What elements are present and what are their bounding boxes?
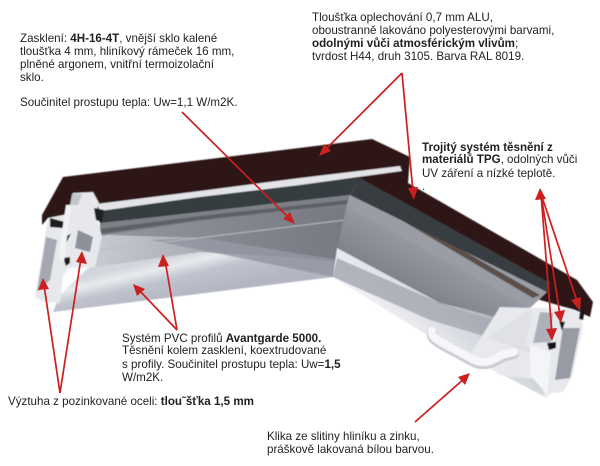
- translucent band right: [333, 258, 500, 337]
- text: triple seal: UV záření a nízké teplotě.: [422, 167, 555, 180]
- dark bead line left: [100, 200, 348, 234]
- arrows: flashing: [319, 73, 418, 200]
- text: triple seal: materiálů TPG: [422, 153, 501, 166]
- text: flashing: odolnými vůči atmosférickým vlivům: [312, 37, 515, 50]
- grey bead right: [347, 192, 547, 308]
- text: PVC profile: W/m2K.: [122, 371, 163, 384]
- text: glazing: Zasklení: 4H-16-4T, vnější sklo kalené: [20, 32, 217, 45]
- text: glazing: plněné argonem, vnitřní termoizolační: [20, 58, 215, 71]
- right cross-section profile: [470, 307, 585, 398]
- text: flashing: oboustranně lakováno polyesterovými barvami,: [312, 24, 554, 37]
- text: glazing: sklo.: [20, 71, 44, 84]
- text: PVC profile: Těsnění kolem zasklení, koextrudované: [122, 344, 326, 357]
- text: glazing: tloušťka 4 mm, hliníkový rámeček 16 mm,: [20, 45, 234, 58]
- text: handle: Klika ze slitiny hliníku a zinku,: [267, 430, 420, 443]
- text: flashing: Tloušťka oplechování 0,7 mm ALU,: [312, 11, 493, 24]
- text: triple seal: Trojitý systém těsnění z: [422, 141, 553, 154]
- left cross-section profile: [35, 192, 104, 303]
- glass highlight line: [100, 220, 345, 250]
- silver rod: [97, 166, 402, 211]
- lower left sill: [53, 252, 337, 312]
- translucent band left: [150, 238, 337, 277]
- text: triple seal: .: [422, 180, 425, 193]
- lower right frame: [333, 248, 547, 398]
- brown strip right: [357, 193, 540, 298]
- dark roof flashing: [42, 139, 593, 317]
- arrows: PVC profile: [133, 254, 177, 330]
- inner dark strip left: [93, 178, 360, 223]
- glass wedge left: [108, 205, 347, 260]
- grey bead left: [100, 195, 350, 236]
- text: steel reinforcement: Výztuha z pozinkované oceli: tlou˜šťka 1,5 mm: [8, 395, 254, 408]
- text: PVC profile: Systém PVC profilů Avantgarde 5000.: [122, 332, 321, 345]
- handle: [432, 331, 514, 364]
- text: flashing: ;: [515, 37, 518, 50]
- text: glazing: Součinitel prostupu tepla: Uw=1,1 W/m2K.: [20, 96, 238, 109]
- arrows: steel reinforcement: [38, 251, 87, 393]
- arrows: triple seal: [535, 188, 581, 341]
- text: flashing: tvrdost H44, druh 3105. Barva RAL 8019.: [312, 50, 524, 63]
- arrow: glazing: [182, 112, 295, 224]
- glass right: [337, 205, 530, 318]
- inner dark strip right: [350, 178, 550, 292]
- text: triple seal: , odolných vůči: [501, 153, 577, 166]
- text: PVC profile: s profily. Součinitel prostupu tepla: Uw=1,5: [122, 358, 341, 371]
- text: handle: práškově lakovaná bílou barvou.: [267, 443, 434, 456]
- arrow: handle: [415, 373, 470, 422]
- window illustration: [35, 139, 593, 398]
- lower left frame: [88, 235, 337, 277]
